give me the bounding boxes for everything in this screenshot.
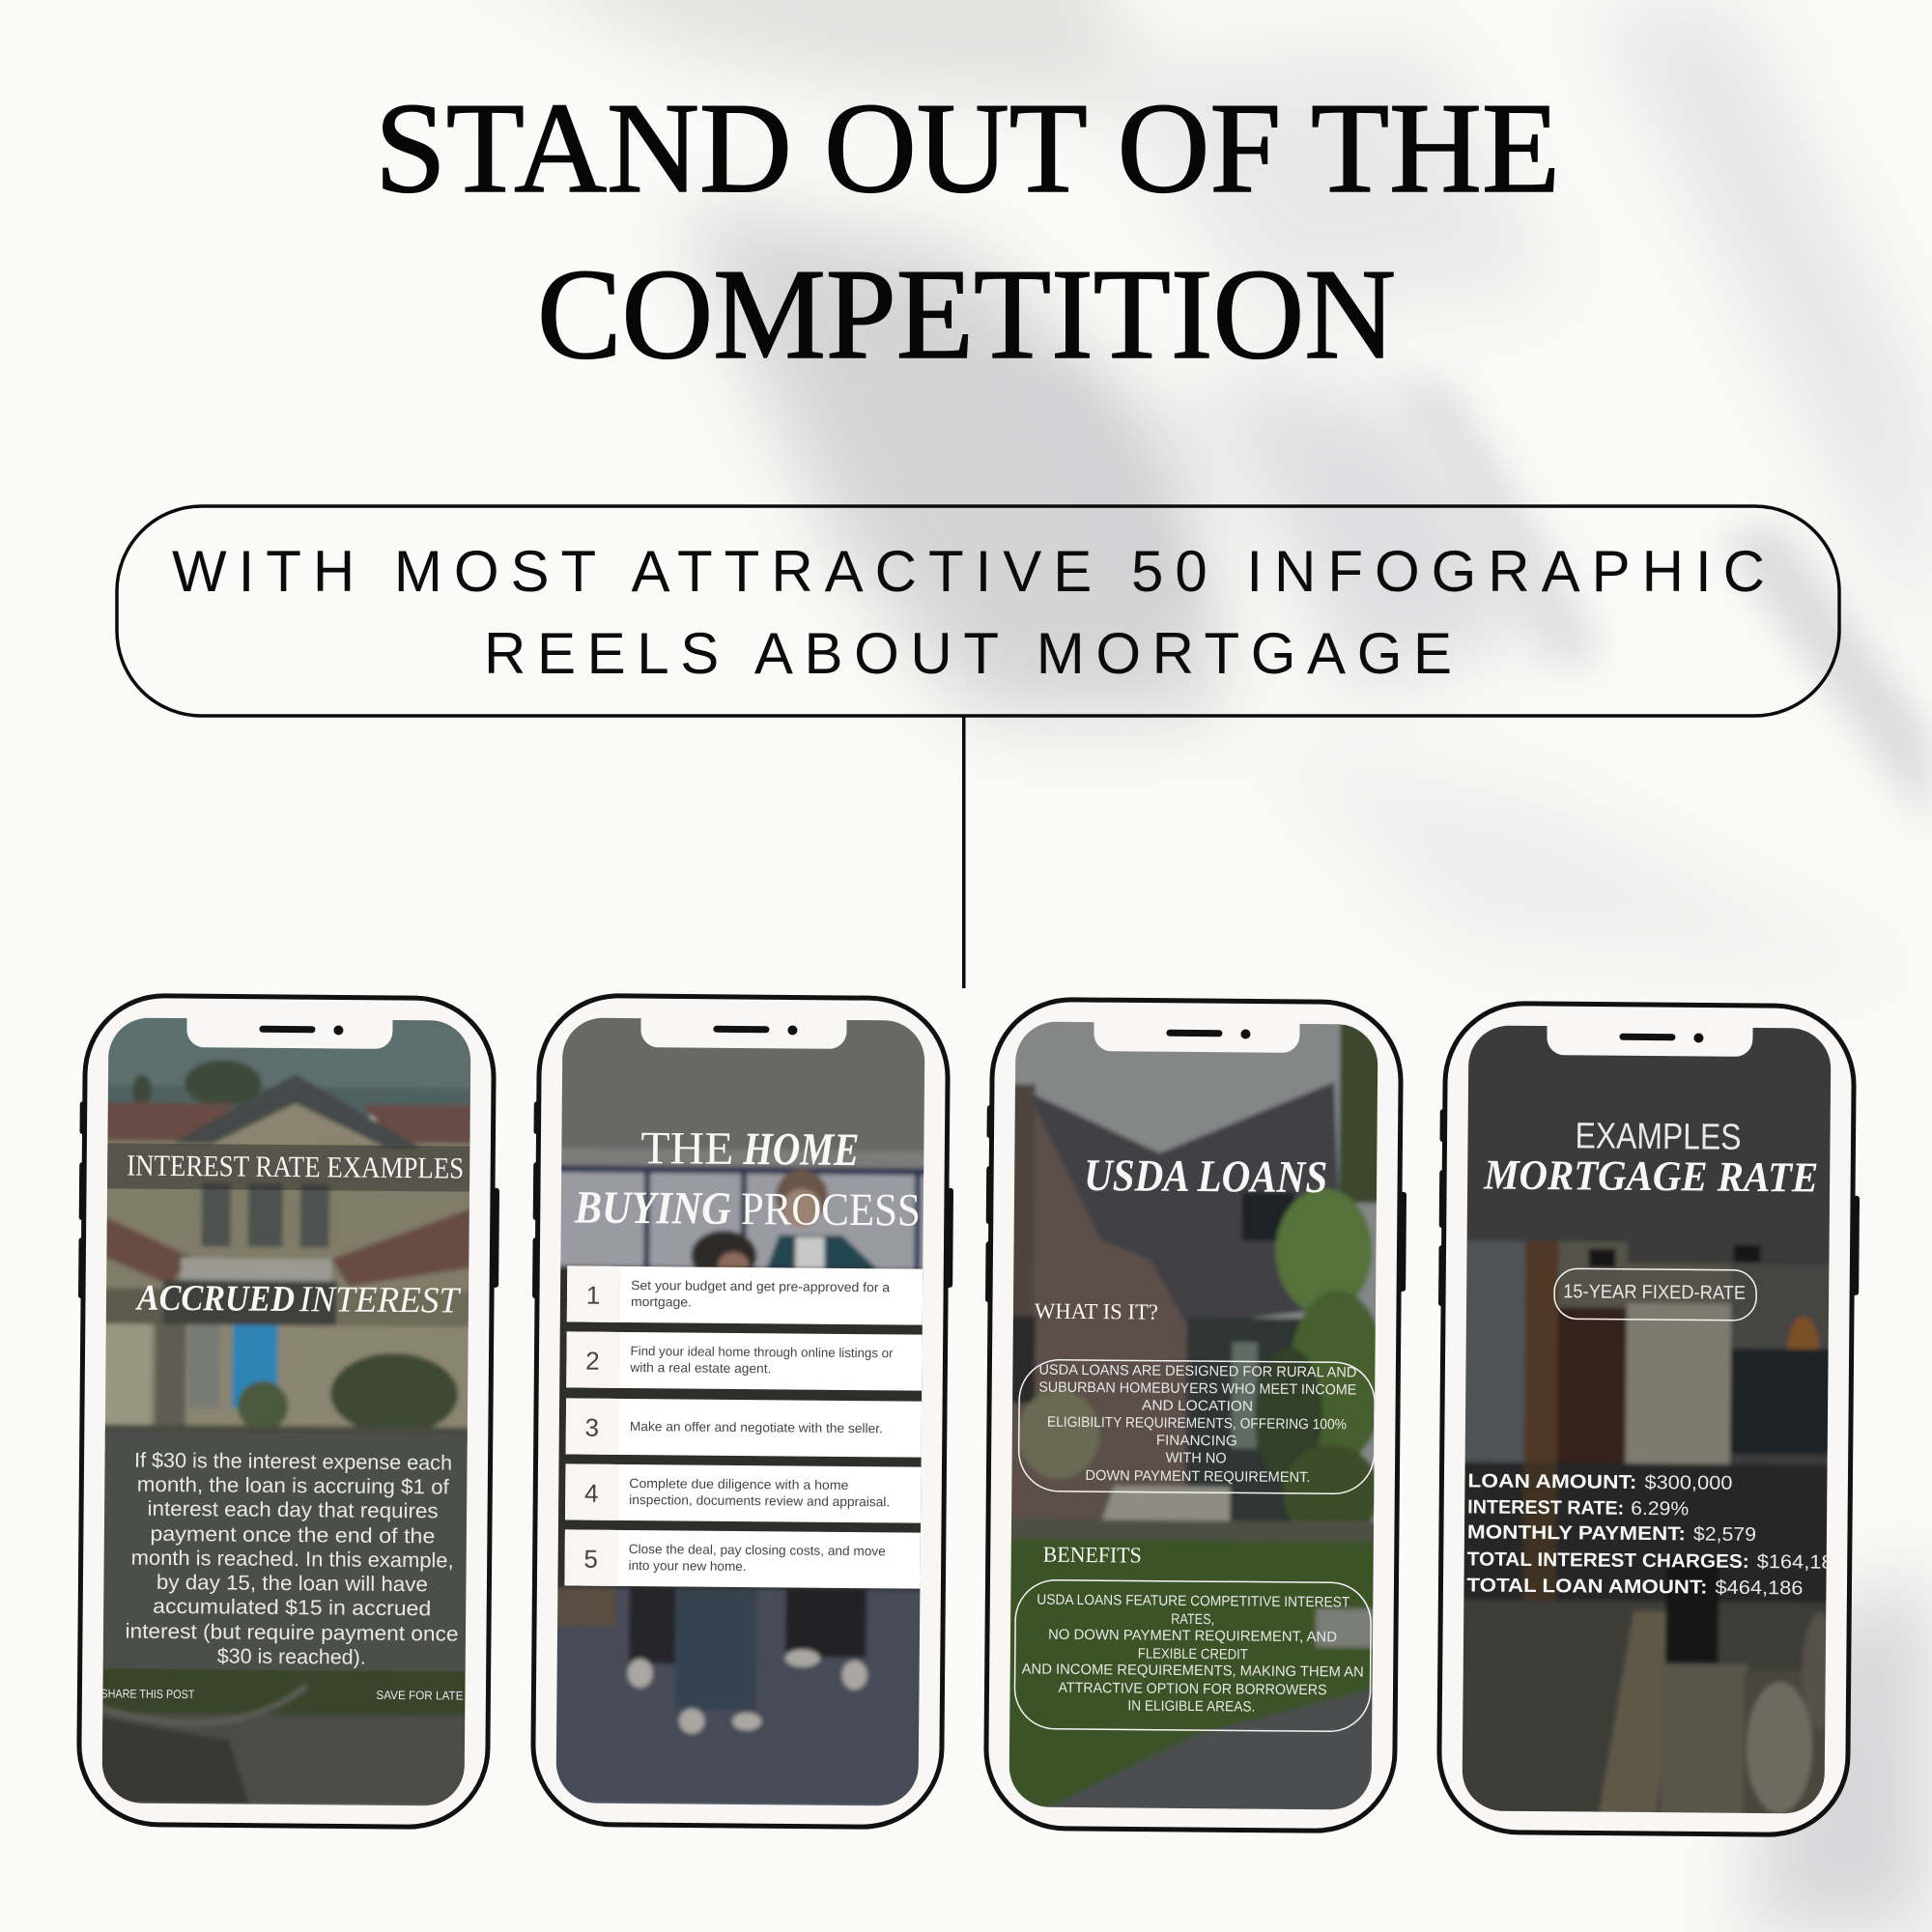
body text: If $30 is the interest expense each xyxy=(134,1449,452,1475)
screen title: PROCESS xyxy=(741,1183,921,1236)
what is it: SUBURBAN HOMEBUYERS WHO MEET INCOME xyxy=(1038,1379,1356,1398)
phone 4: mortgage rate examples xyxy=(1434,1003,1861,1835)
step 5: into your new home. xyxy=(629,1558,747,1574)
phone 3: USDA loans xyxy=(980,999,1408,1832)
step 2: 2 xyxy=(585,1347,600,1376)
rate pill: 15-YEAR FIXED-RATE xyxy=(1563,1281,1746,1304)
screen heading: INTEREST RATE EXAMPLES xyxy=(127,1149,464,1185)
step 1: 1 xyxy=(586,1281,600,1310)
what is it: WITH NO xyxy=(1166,1450,1227,1466)
body text: payment once the end of the xyxy=(150,1522,435,1548)
what is it: FINANCING xyxy=(1156,1433,1237,1449)
body text: $30 is reached). xyxy=(217,1644,366,1669)
body text xyxy=(125,1449,460,1670)
step 4: 4 xyxy=(584,1479,599,1508)
body text: interest each day that requires xyxy=(148,1497,439,1522)
loan figures: TOTAL INTEREST CHARGES: xyxy=(1467,1548,1749,1573)
loan figures: 6.29% xyxy=(1631,1498,1690,1520)
subtitle pill: WITH MOST ATTRACTIVE 50 INFOGRAPHIC xyxy=(172,539,1765,604)
loan figures: $164,186 xyxy=(1757,1551,1845,1574)
screen title: USDA LOANS xyxy=(1084,1151,1327,1203)
screen title xyxy=(135,1285,462,1313)
loan figures: MONTHLY PAYMENT: xyxy=(1467,1521,1686,1545)
body text: accumulated $15 in accrued xyxy=(153,1595,431,1620)
step 4: Complete due diligence with a home xyxy=(629,1476,848,1492)
loan figures: $300,000 xyxy=(1644,1472,1733,1494)
what is it xyxy=(1018,1298,1376,1494)
benefits: FLEXIBLE CREDIT xyxy=(1138,1646,1248,1663)
what is it: USDA LOANS ARE DESIGNED FOR RURAL AND xyxy=(1038,1362,1357,1380)
subtitle pill xyxy=(117,506,1839,716)
benefits: RATES, xyxy=(1171,1611,1214,1628)
step 4: inspection, documents review and appraisal. xyxy=(629,1492,890,1509)
step 3: Make an offer and negotiate with the seller. xyxy=(630,1419,883,1435)
benefits: ATTRACTIVE OPTION FOR BORROWERS xyxy=(1058,1680,1327,1698)
loan figures: $2,579 xyxy=(1693,1523,1756,1546)
benefits xyxy=(1014,1542,1372,1732)
what is it: WHAT IS IT? xyxy=(1035,1299,1158,1324)
body text: month, the loan is accruing $1 of xyxy=(137,1473,449,1498)
benefits: IN ELIGIBLE AREAS. xyxy=(1127,1697,1255,1716)
step 2 xyxy=(566,1331,926,1391)
step 1: mortgage. xyxy=(631,1294,692,1310)
step 2: with a real estate agent. xyxy=(629,1360,771,1376)
what is it: DOWN PAYMENT REQUIREMENT. xyxy=(1085,1467,1311,1486)
loan figures: $464,186 xyxy=(1715,1577,1804,1599)
body text: interest (but require payment once xyxy=(125,1620,459,1646)
share and save labels: SHARE THIS POST xyxy=(100,1687,195,1701)
share and save labels: SAVE FOR LATE xyxy=(376,1689,463,1703)
what is it: AND LOCATION xyxy=(1142,1398,1253,1415)
screen title xyxy=(1483,1116,1819,1202)
body text: by day 15, the loan will have xyxy=(156,1571,428,1596)
loan figures: INTEREST RATE: xyxy=(1467,1496,1624,1520)
step 3 xyxy=(566,1398,925,1458)
screen title: HOME xyxy=(742,1123,860,1176)
screen title: MORTGAGE RATE xyxy=(1483,1151,1818,1202)
title: STAND OUT OF THE xyxy=(375,76,1560,219)
step 2: Find your ideal home through online listings or xyxy=(630,1344,894,1360)
benefits: NO DOWN PAYMENT REQUIREMENT, AND xyxy=(1048,1627,1337,1645)
title xyxy=(375,76,1560,385)
subtitle pill: REELS ABOUT MORTGAGE xyxy=(484,621,1452,686)
body text: month is reached. In this example, xyxy=(131,1547,454,1573)
phone 2: home buying process xyxy=(527,995,955,1828)
title: COMPETITION xyxy=(537,242,1396,385)
what is it: ELIGIBILITY REQUIREMENTS, OFFERING 100% xyxy=(1047,1414,1347,1433)
loan figures: LOAN AMOUNT: xyxy=(1467,1470,1637,1493)
benefits: BENEFITS xyxy=(1043,1543,1142,1568)
step 1 xyxy=(567,1265,926,1325)
step 5 xyxy=(564,1529,924,1589)
step 5: Close the deal, pay closing costs, and move xyxy=(629,1542,886,1558)
connector line xyxy=(962,716,966,988)
benefits: USDA LOANS FEATURE COMPETITIVE INTEREST xyxy=(1037,1592,1350,1610)
screen title: THE xyxy=(640,1122,734,1175)
screen title: INTEREST xyxy=(298,1279,462,1321)
screen title xyxy=(574,1132,918,1226)
step 1: Set your budget and get pre-approved for a xyxy=(631,1278,891,1294)
loan figures xyxy=(1466,1470,1846,1600)
screen title: ACCRUED xyxy=(135,1278,295,1320)
screen title: EXAMPLES xyxy=(1575,1116,1742,1158)
step 5: 5 xyxy=(583,1545,598,1574)
step 3: 3 xyxy=(584,1413,599,1442)
share and save labels xyxy=(102,1689,463,1700)
rate pill xyxy=(1554,1268,1756,1321)
loan figures: TOTAL LOAN AMOUNT: xyxy=(1466,1575,1708,1599)
screen title: BUYING xyxy=(574,1181,731,1235)
benefits: AND INCOME REQUIREMENTS, MAKING THEM AN xyxy=(1022,1661,1364,1681)
step 4 xyxy=(565,1463,925,1523)
phone 1: accrued interest xyxy=(73,995,501,1828)
